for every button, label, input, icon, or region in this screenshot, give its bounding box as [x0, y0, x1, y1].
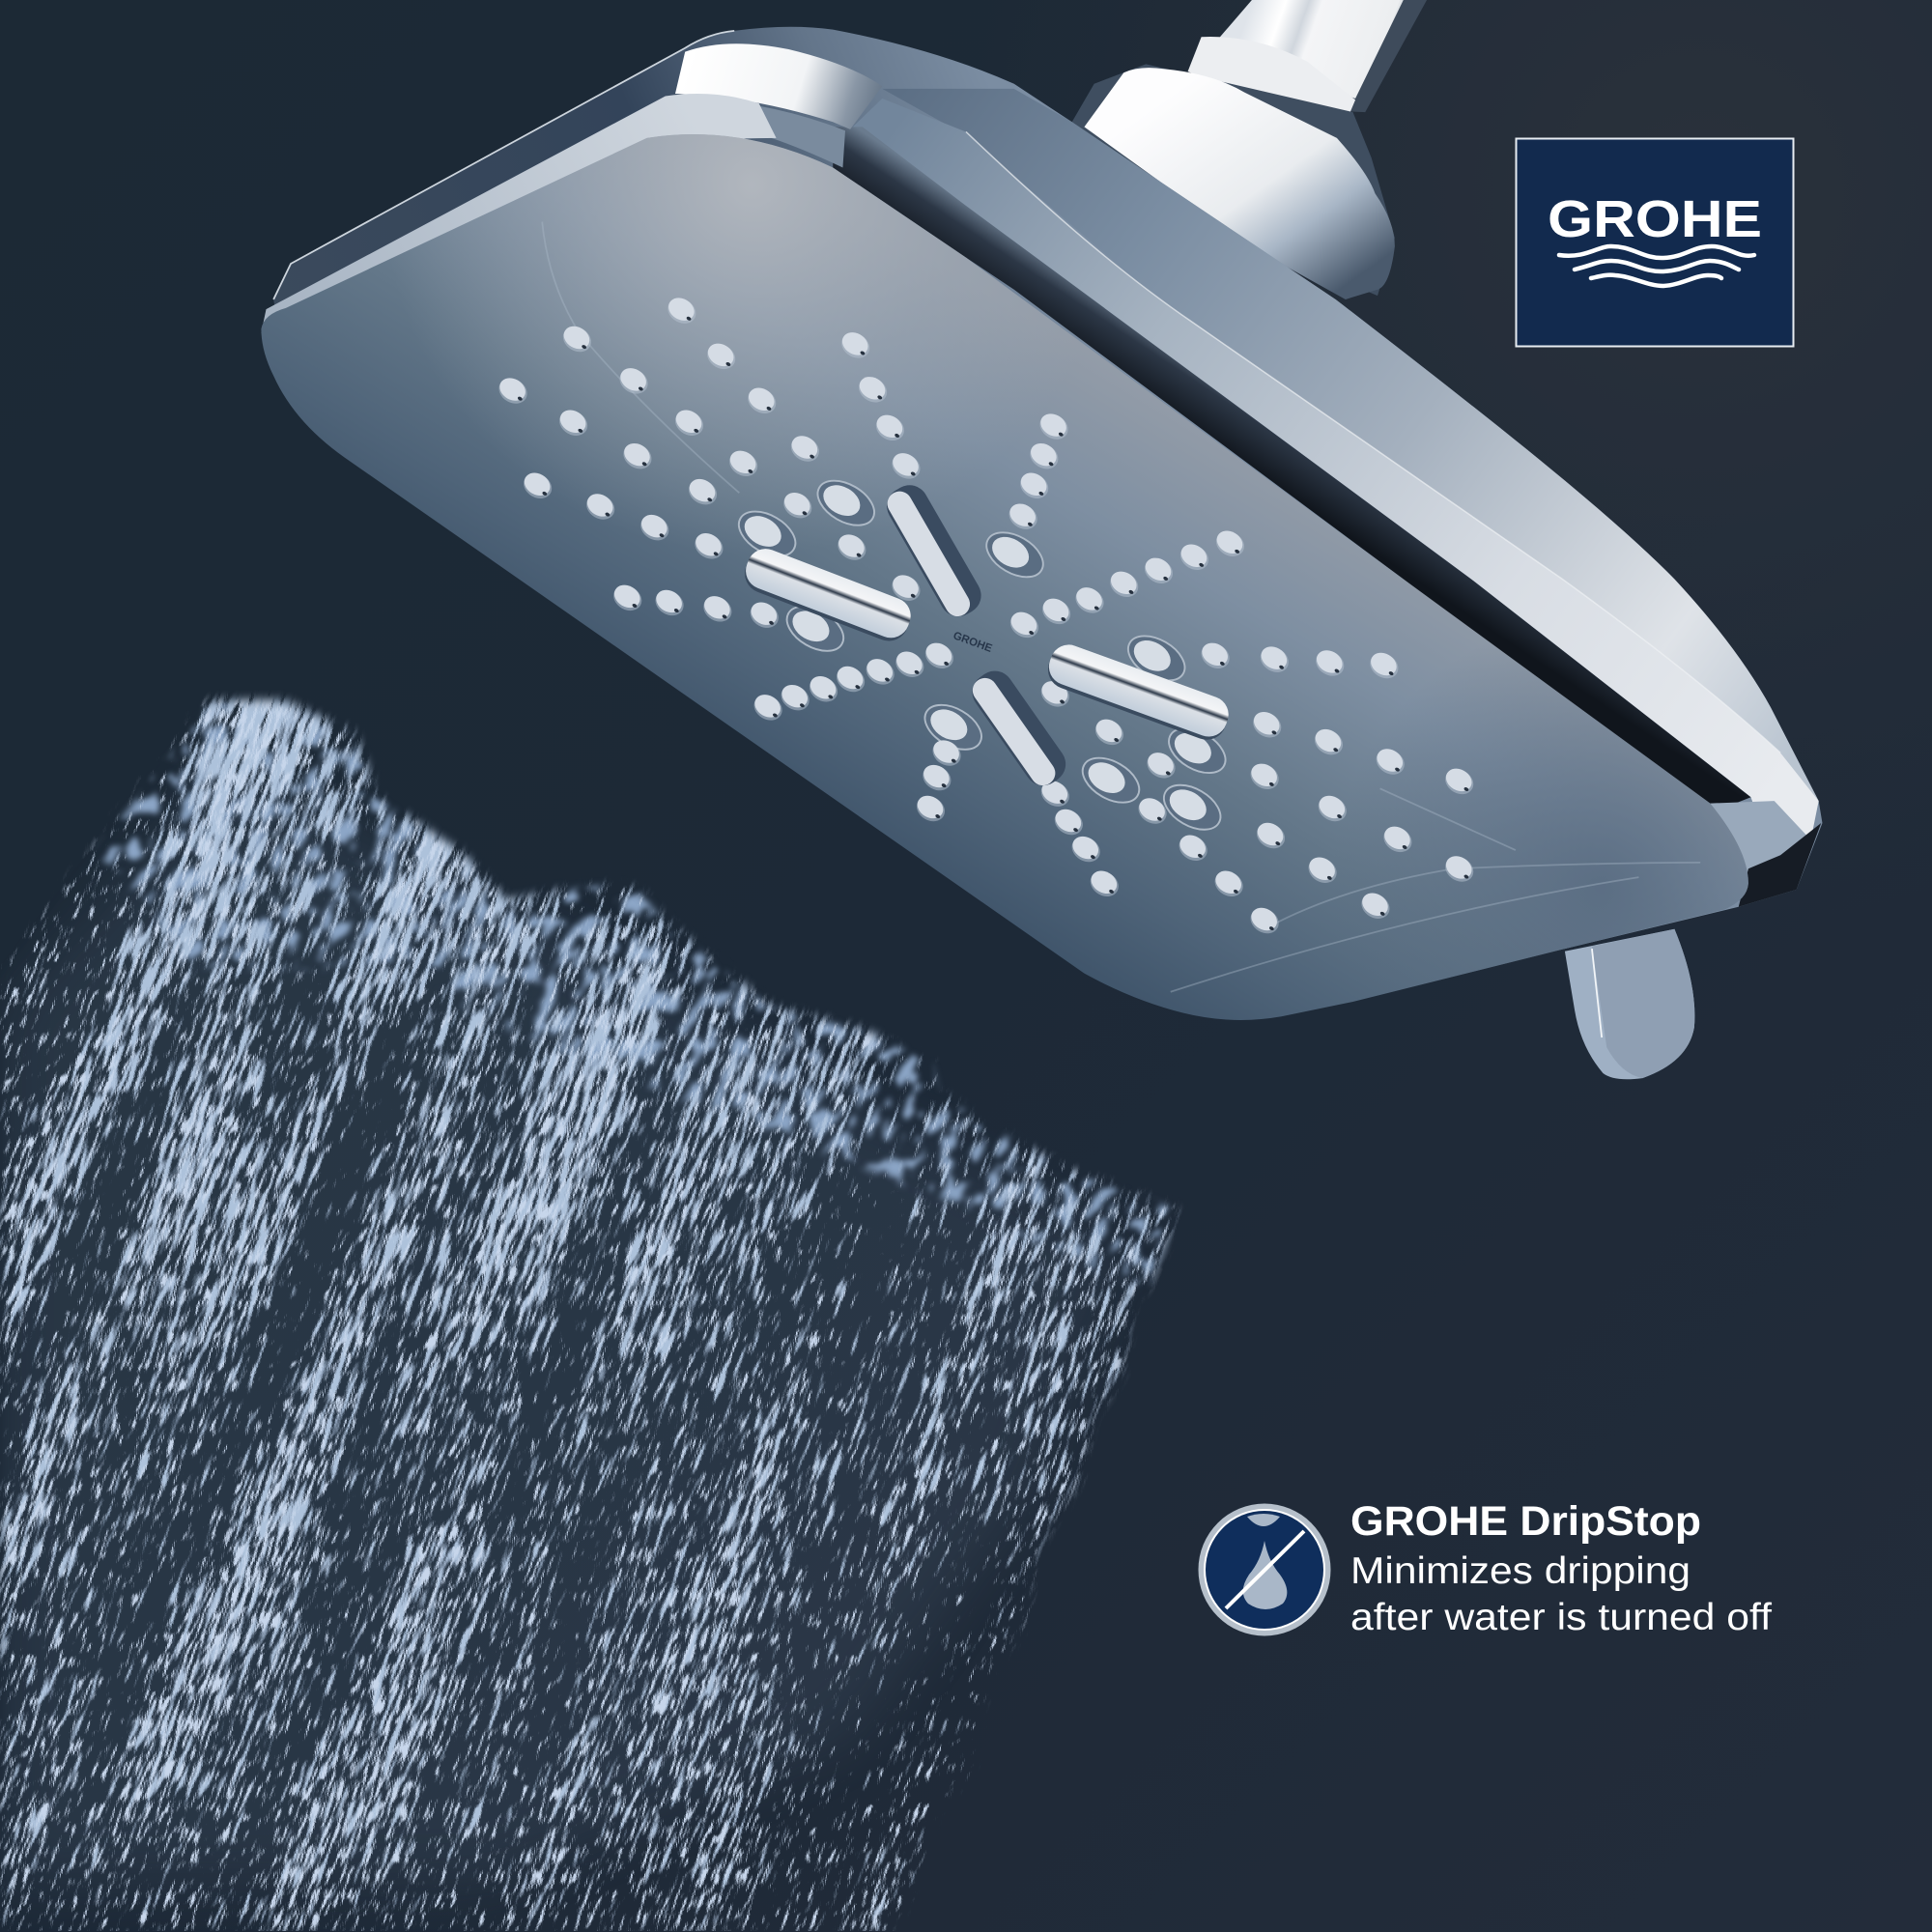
outer shell edge highlight — [273, 31, 734, 299]
outer shell — [273, 27, 1822, 985]
slot nozzle 1 — [739, 544, 916, 646]
pipe — [1337, 0, 1427, 112]
water spray — [0, 693, 1183, 1931]
dark chrome band — [833, 127, 1750, 813]
spray droplets: soft upper blobs — [100, 699, 1172, 1289]
light band — [850, 99, 1819, 863]
hand shower tab — [1565, 929, 1694, 1079]
thin band line — [966, 131, 1780, 753]
logo box — [1517, 139, 1793, 346]
icon: no-drip — [1198, 1503, 1331, 1636]
left rim light band — [261, 94, 777, 345]
DripStop badge — [1198, 1498, 1772, 1638]
GROHE logo — [1517, 139, 1793, 346]
description: Minimizes dripping — [1350, 1550, 1690, 1592]
small engraved logo: GROHE — [952, 630, 994, 655]
face highlight — [261, 134, 1748, 1020]
face plate — [261, 134, 1748, 1020]
face lower right tone — [1208, 579, 1748, 1022]
slot nozzle 3 — [1042, 639, 1234, 745]
spray droplets: medium streaks — [0, 628, 1256, 1932]
collar — [1084, 68, 1395, 299]
chrome corner — [675, 43, 882, 129]
face reflection lines — [542, 222, 1700, 992]
hex nut — [1188, 37, 1355, 138]
spray glow — [0, 763, 1121, 1884]
right corner chrome — [1710, 801, 1811, 884]
outer band — [882, 89, 1819, 823]
DripStop badge: after water is turned off — [1350, 1597, 1772, 1638]
logo waves — [1559, 246, 1754, 286]
right corner dark — [1739, 823, 1821, 907]
nozzles — [495, 294, 1478, 938]
slot nozzle 2 — [880, 478, 988, 623]
collar glass — [1072, 64, 1395, 296]
slot nozzle 4 — [965, 664, 1073, 793]
corner shadow chrome — [759, 106, 845, 167]
shower head — [261, 0, 1822, 1079]
spray droplets: fine streaks — [0, 628, 1256, 1932]
heading: GROHE DripStop — [1350, 1498, 1701, 1545]
logo wordmark: GROHE — [1548, 190, 1762, 248]
